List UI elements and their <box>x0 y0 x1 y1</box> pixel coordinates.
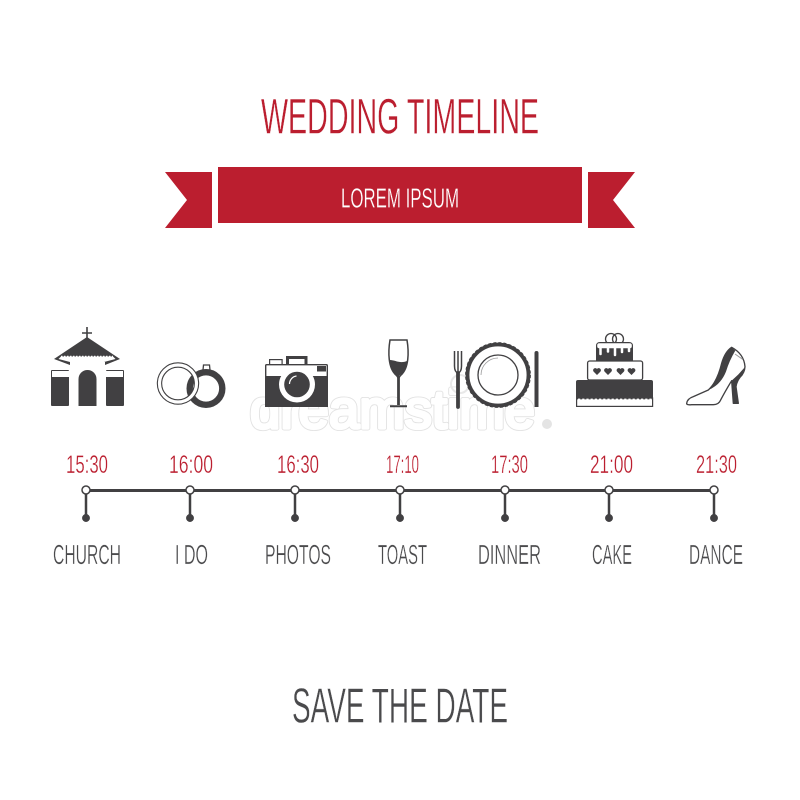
timeline nodes <box>82 486 718 494</box>
times: 17:30 <box>491 451 528 479</box>
event labels <box>53 539 743 570</box>
event labels: PHOTOS <box>265 539 331 570</box>
timeline stems and end dots <box>83 490 717 521</box>
icon: high heel shoe <box>687 347 745 405</box>
icon: dinner plate with fork and knife <box>454 343 538 407</box>
times: 21:00 <box>590 451 633 479</box>
event labels: TOAST <box>378 539 427 570</box>
times: 15:30 <box>66 451 108 479</box>
event labels: CHURCH <box>53 539 121 570</box>
event labels: I DO <box>175 539 208 570</box>
timeline <box>82 486 718 521</box>
times: 17:10 <box>386 451 419 479</box>
times: 16:30 <box>277 451 319 479</box>
times: 16:00 <box>169 451 213 479</box>
ribbon text: LOREM IPSUM <box>341 182 459 214</box>
ribbon banner <box>165 167 635 228</box>
times <box>66 451 737 479</box>
title: WEDDING TIMELINE <box>261 88 539 144</box>
icon: church <box>51 327 124 406</box>
watermark: dreamstime <box>250 380 535 440</box>
ribbon left tail <box>165 172 212 228</box>
watermark: dreamstime <box>250 380 535 440</box>
event labels: DANCE <box>689 539 743 570</box>
icon: wine glass <box>389 340 408 406</box>
ribbon right tail <box>588 172 635 228</box>
icon: wedding rings <box>160 365 222 405</box>
timeline line <box>86 489 714 492</box>
ribbon main band <box>218 167 582 223</box>
times: 21:30 <box>696 451 737 479</box>
event labels: CAKE <box>592 539 632 570</box>
event labels: DINNER <box>478 539 541 570</box>
icon: wedding cake <box>576 334 653 406</box>
footer: save the date: SAVE THE DATE <box>292 680 508 734</box>
icon: camera <box>265 358 328 407</box>
